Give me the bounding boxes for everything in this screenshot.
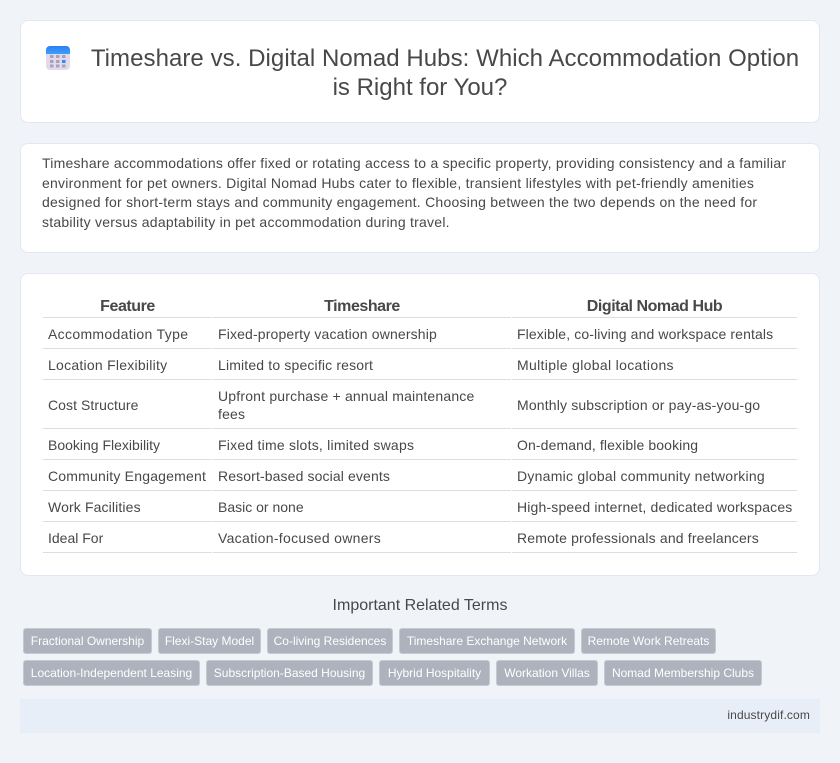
footer source: industrydif.com — [727, 708, 810, 722]
row: community engagement: Dynamic global community networking — [517, 468, 765, 484]
row: cost structure — [48, 388, 760, 422]
related term tags: Nomad Membership Clubs — [612, 666, 754, 680]
row: location flexibility: Limited to specific resort — [218, 357, 373, 373]
row: accommodation type: Accommodation Type — [48, 326, 188, 342]
row: booking flexibility: On-demand, flexible booking — [517, 437, 698, 453]
row: booking flexibility — [48, 437, 698, 453]
table header: Feature — [100, 298, 155, 315]
row: cost structure: Monthly subscription or pay-as-you-go — [517, 397, 760, 413]
row: location flexibility: Location Flexibility — [48, 357, 167, 373]
icon: calendar — [46, 46, 70, 70]
footer bar — [20, 699, 820, 733]
row: ideal for: Vacation-focused owners — [218, 530, 381, 546]
related term tags: Remote Work Retreats — [588, 634, 709, 648]
related term tags: Location-Independent Leasing — [31, 666, 192, 680]
row: ideal for: Remote professionals and freelancers — [517, 530, 759, 546]
related term tags: Timeshare Exchange Network — [407, 634, 567, 648]
intro paragraph: environment for pet owners. Digital Nomad Hubs cater to flexible, transient lifestyles with pet-friendly amenities — [42, 174, 754, 190]
panel: comparison table — [20, 273, 820, 576]
row: community engagement: Community Engagement — [48, 468, 206, 484]
row: accommodation type: Flexible, co-living and workspace rentals — [517, 326, 773, 342]
row: community engagement — [48, 468, 765, 484]
heading: important related terms: Important Related Terms — [333, 597, 507, 614]
related term tags — [23, 628, 762, 686]
panel: intro text — [20, 143, 820, 253]
title — [91, 45, 799, 101]
table header: Timeshare — [324, 298, 400, 315]
related term tags: Subscription-Based Housing — [214, 666, 365, 680]
row: location flexibility: Multiple global locations — [517, 357, 674, 373]
title: Timeshare vs. Digital Nomad Hubs: Which Accommodation Option — [91, 45, 799, 72]
related term tags: Fractional Ownership — [31, 634, 144, 648]
row: ideal for: Ideal For — [48, 530, 103, 546]
row: work facilities: Work Facilities — [48, 499, 141, 515]
row: location flexibility — [48, 357, 674, 373]
row: cost structure: fees — [218, 406, 245, 422]
row: work facilities — [48, 499, 792, 515]
intro paragraph: Timeshare accommodations offer fixed or rotating access to a specific property, providing consistency and a familiar — [42, 155, 786, 171]
panel: title card — [20, 20, 820, 123]
intro paragraph — [42, 155, 786, 230]
table header: Digital Nomad Hub — [587, 298, 722, 315]
row: work facilities: High-speed internet, dedicated workspaces — [517, 499, 792, 515]
row: cost structure: Cost Structure — [48, 397, 138, 413]
row: work facilities: Basic or none — [218, 499, 304, 515]
row: accommodation type: Fixed-property vacation ownership — [218, 326, 437, 342]
title: is Right for You? — [333, 74, 507, 101]
row: accommodation type — [48, 326, 773, 342]
row: booking flexibility: Booking Flexibility — [48, 437, 160, 453]
related term tags: Hybrid Hospitality — [388, 666, 481, 680]
intro paragraph: designed for short-term stays and community engagement. Choosing between the two depends on the need for — [42, 194, 757, 210]
intro paragraph: stability versus adaptability in pet accommodation during travel. — [42, 214, 450, 230]
row: cost structure: Upfront purchase + annual maintenance — [218, 388, 474, 404]
row: ideal for — [48, 530, 759, 546]
related term tags: Flexi-Stay Model — [165, 634, 254, 648]
table header — [100, 298, 722, 315]
related term tags: Co-living Residences — [274, 634, 386, 648]
row: community engagement: Resort-based social events — [218, 468, 390, 484]
row: booking flexibility: Fixed time slots, limited swaps — [218, 437, 414, 453]
related term tags: Workation Villas — [504, 666, 590, 680]
